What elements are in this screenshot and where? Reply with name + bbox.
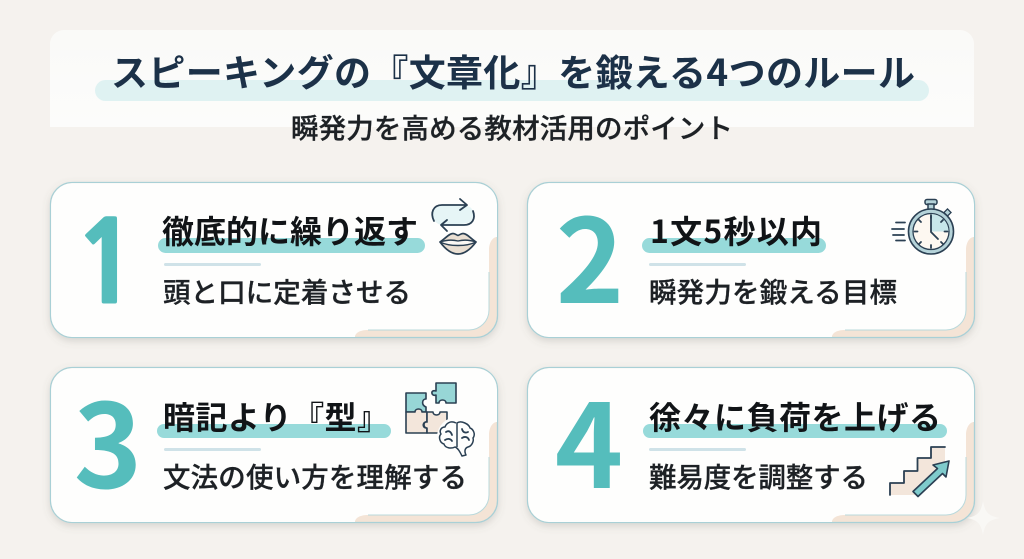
header panel bbox=[50, 30, 974, 146]
heading highlight 2 bbox=[642, 238, 826, 253]
decorative sparkle bbox=[967, 501, 1000, 535]
icon: puzzle and brain bbox=[406, 383, 477, 457]
heading 2: 1文5秒以内 bbox=[650, 207, 822, 253]
heading 4: 徐々に負荷を上げる bbox=[649, 393, 941, 439]
panel: card 3 bbox=[50, 354, 498, 522]
panel: card 1 bbox=[50, 182, 498, 338]
title highlight bbox=[95, 80, 929, 101]
panel: card 2 bbox=[528, 169, 974, 338]
divider 1 bbox=[164, 263, 261, 266]
heading highlight 4 bbox=[643, 424, 947, 438]
heading highlight 1 bbox=[158, 238, 425, 253]
divider 4 bbox=[649, 448, 746, 451]
title: スピーキングの『文章化』を鍛える4つのルール bbox=[111, 43, 915, 97]
subtext 3: 文法の使い方を理解する bbox=[163, 455, 467, 495]
panel: card 4 bbox=[528, 354, 974, 522]
subtext 2: 瞬発力を鍛える目標 bbox=[649, 270, 897, 310]
divider 3 bbox=[164, 448, 261, 451]
heading 3: 暗記より『型』 bbox=[163, 393, 389, 439]
icon: repeat arrows and lips bbox=[432, 199, 476, 254]
number 4: 4 bbox=[555, 354, 623, 522]
number 1: 1 bbox=[73, 208, 141, 320]
icon: stopwatch bbox=[892, 200, 954, 254]
divider 2 bbox=[649, 263, 746, 266]
heading 1: 徹底的に繰り返す bbox=[162, 207, 418, 253]
number 2: 2 bbox=[556, 169, 624, 337]
number 3: 3 bbox=[74, 354, 142, 522]
subtext 4: 難易度を調整する bbox=[649, 455, 868, 495]
icon: stairs and arrow bbox=[890, 447, 949, 496]
subtext 1: 頭と口に定着させる bbox=[163, 270, 411, 310]
subtitle: 瞬発力を高める教材活用のポイント bbox=[291, 106, 733, 146]
heading highlight 3 bbox=[157, 424, 391, 438]
